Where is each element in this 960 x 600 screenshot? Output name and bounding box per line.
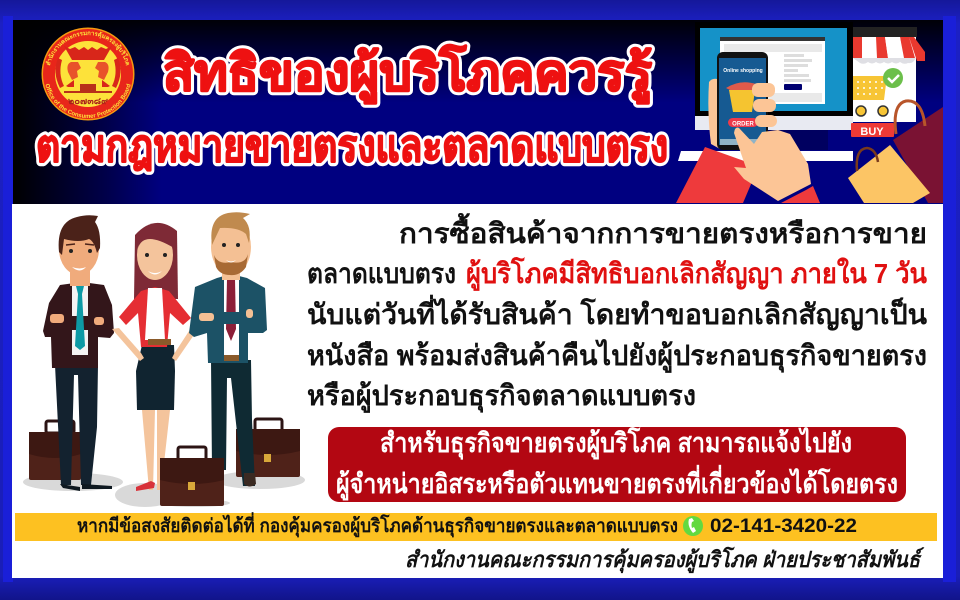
seal ring text top: สำนักงานคณะกรรมการคุ้มครองผู้บริโภค (46, 32, 130, 66)
body text (307, 212, 927, 413)
phone: ORDER (732, 122, 754, 128)
monitor neck (760, 130, 828, 150)
header band (13, 20, 943, 204)
monitor (695, 22, 853, 130)
logo: Office of the Consumer Protection Board seal (42, 28, 134, 120)
phone (717, 52, 768, 150)
title line 1 weight overlay: สิทธิของผู้บริโภคควรรู้ (163, 43, 652, 104)
sleeves (676, 147, 757, 203)
seal ring text bottom: Office of the Consumer Protection Board (46, 84, 131, 118)
white content panel (12, 204, 943, 578)
title line 1: สิทธิของผู้บริโภคควรรู้ (163, 43, 652, 104)
phone number: 02-141-3420-22 (710, 516, 857, 537)
woman centre (112, 223, 198, 491)
briefcase centre (160, 447, 224, 506)
illustration: three business people with briefcases (23, 212, 305, 507)
seal digits: ๒๐๗๓๘๙ (68, 96, 108, 106)
footer: issuing office: สำนักงานคณะกรรมการคุ้มครองผู้บริโภค ฝ่ายประชาสัมพันธ์ (405, 546, 925, 574)
briefcase left (29, 421, 81, 480)
ground shadows (23, 471, 305, 507)
shop card (851, 27, 925, 138)
hand behind phone (708, 79, 720, 149)
monitor stand foot (678, 151, 853, 161)
callout line 1: สำหรับธุรกิจขายตรงผู้บริโภค สามารถแจ้งไปยัง (380, 426, 852, 460)
shopping bag: maroon (893, 101, 943, 203)
title line 2: ตามกฎหมายขายตรงและตลาดแบบตรง (36, 122, 668, 171)
phone: Online shopping (723, 68, 763, 74)
briefcase right (236, 419, 300, 477)
body line 3: นับแต่วันที่ได้รับสินค้า โดยทำขอบอกเลิกสัญญาเป็น (307, 294, 927, 331)
red callout (328, 426, 906, 502)
hand and fingers (734, 83, 811, 201)
illustration: online shopping (676, 22, 943, 203)
title line 2 weight overlay: ตามกฎหมายขายตรงและตลาดแบบตรง (36, 122, 668, 171)
body line 4: หนังสือ พร้อมส่งสินค้าคืนไปยังผู้ประกอบธุรกิจขายตรง (307, 339, 927, 373)
yellow contact bar (15, 512, 937, 541)
body line 2 black: ตลาดแบบตรง (307, 258, 456, 289)
icon: phone (683, 516, 703, 536)
body line 5: หรือผู้ประกอบธุรกิจตลาดแบบตรง (307, 380, 696, 413)
shopping bag: yellow (848, 145, 930, 203)
man right (189, 212, 267, 486)
body line 1: การซื้อสินค้าจากการขายตรงหรือการขาย (399, 212, 927, 249)
body line 2 red highlight: ผู้บริโภคมีสิทธิบอกเลิกสัญญา ภายใน 7 วัน (466, 256, 927, 291)
contact text: หากมีข้อสงสัยติดต่อได้ที่ กองคุ้มครองผู้บริโภคด้านธุรกิจขายตรงและตลาดแบบตรง (77, 512, 678, 538)
man left (43, 215, 114, 491)
shop card: BUY (860, 126, 884, 138)
